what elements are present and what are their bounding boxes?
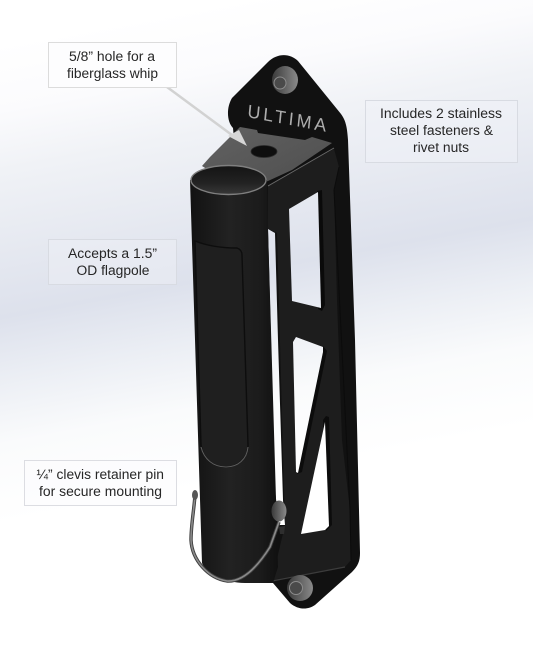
top fastener — [272, 66, 298, 94]
callout: fasteners: Includes 2 stainless — [380, 106, 502, 121]
callout: flagpole size: Accepts a 1.5” — [68, 246, 157, 261]
bracket face — [268, 149, 351, 580]
bottom fastener — [287, 575, 313, 601]
callout: fasteners — [366, 100, 518, 162]
callout: clevis pin: ¼” clevis retainer pin — [36, 467, 164, 482]
callout: fiberglass whip hole — [48, 42, 176, 88]
tube opening — [191, 166, 266, 194]
callout: clevis pin — [24, 460, 176, 506]
flagpole tube — [190, 180, 278, 583]
mounting plate — [228, 55, 360, 609]
clevis retainer pin — [191, 490, 286, 581]
lanyard cable — [191, 495, 279, 581]
callout: fasteners: steel fasteners & — [390, 123, 493, 138]
product: flagpole mount — [190, 55, 360, 609]
whip hole — [251, 146, 277, 158]
lower triangular window — [301, 416, 332, 534]
ULTIMA cutout lettering: ULTIMA — [247, 101, 327, 136]
upper window — [289, 190, 325, 311]
callout: fiberglass whip hole: fiberglass whip — [67, 66, 158, 81]
callout: flagpole size — [48, 240, 176, 284]
gap between tube and bracket — [268, 229, 285, 525]
cable end — [192, 490, 198, 500]
bracket seam lines — [268, 148, 351, 581]
slot lower highlight — [201, 447, 248, 467]
pin head — [272, 500, 286, 522]
tube slot — [195, 241, 248, 467]
callout: fiberglass whip hole: 5/8” hole for a — [69, 49, 155, 64]
grey top plate — [202, 127, 332, 190]
middle window — [293, 337, 327, 474]
pin tail — [279, 526, 285, 534]
callout arrow — [167, 87, 247, 146]
callout: fasteners: rivet nuts — [413, 140, 469, 155]
callout: clevis pin: for secure mounting — [39, 484, 162, 499]
callout: flagpole size: OD flagpole — [76, 263, 150, 278]
